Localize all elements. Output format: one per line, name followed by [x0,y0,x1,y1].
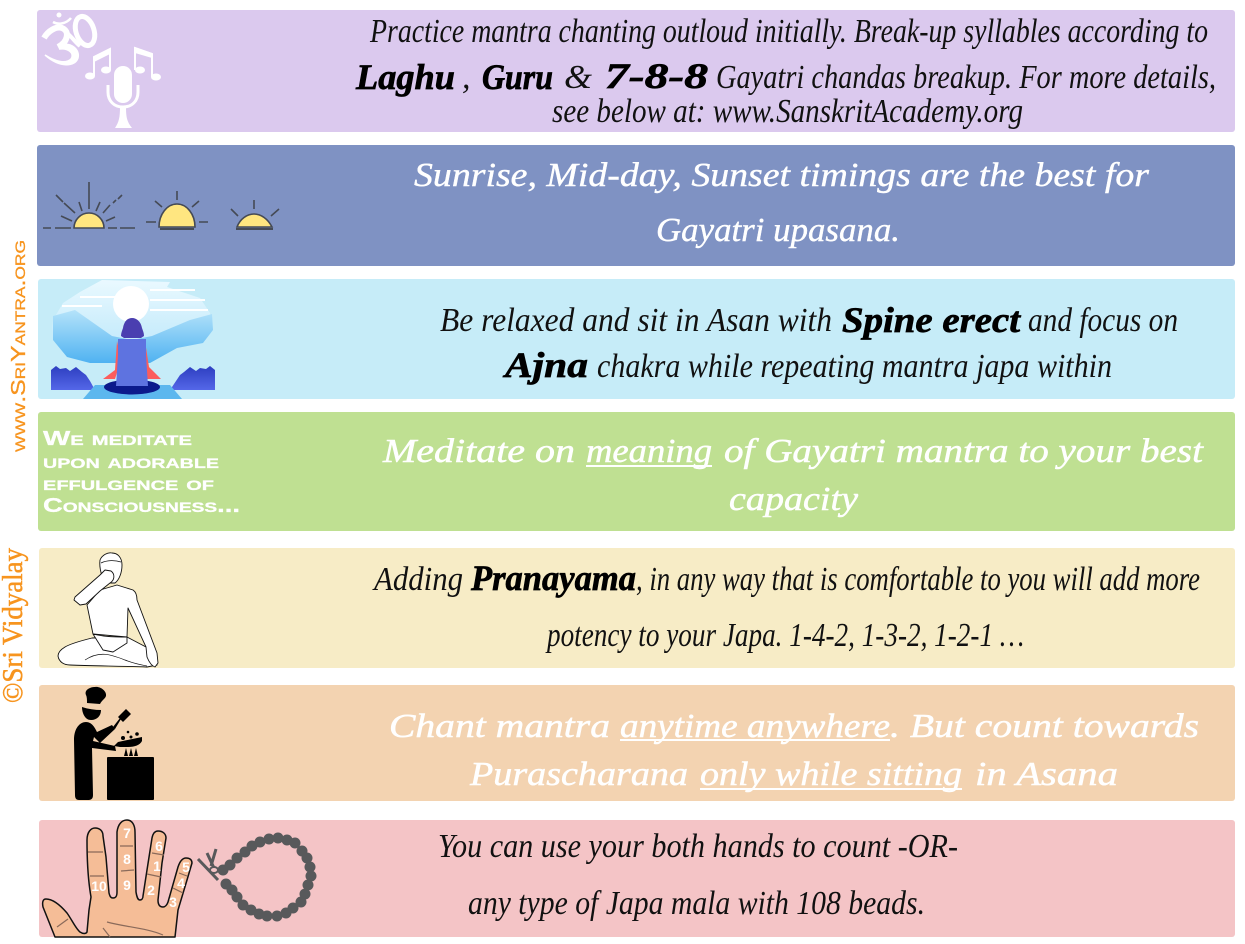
panel: posture [38,279,1235,399]
chanting text [355,13,1216,130]
meaning text [382,433,1205,518]
icon: three suns [43,182,279,229]
posture text: chakra while repeating mantra japa within [597,348,1112,385]
chanting text: & [564,59,593,96]
counting text: You can use your both hands to count -OR- [438,828,958,865]
icon: hand with counting numbers [43,820,192,937]
timings text [414,157,1150,249]
icon: hand with counting numbers: 4 [177,875,185,891]
icon: om with microphone and music notes [44,12,161,128]
chanting text: 7-8-8 [605,56,708,96]
chanting text: Laghu [355,57,455,97]
timings text: Sunrise, Mid-day, Sunset timings are the best for [414,157,1150,194]
timings text: Gayatri upasana. [656,212,900,249]
panel: timings [37,145,1235,266]
chant anywhere text: Chant mantra [389,708,610,745]
panel: meaning [38,412,1235,531]
meaning text: meaning [586,433,712,470]
mantra translation text: upon adorable [43,451,219,473]
icon: chef cooking [74,687,154,800]
icon: hand with counting numbers: 2 [147,882,155,898]
chant anywhere text: Purascharana [469,756,688,793]
counting text [438,828,958,922]
panel: chanting [37,10,1235,132]
icon: japa mala beads [198,832,316,922]
pranayama text [372,558,1200,654]
chant anywhere text: only while sitting [700,756,962,793]
posture text [440,300,1178,385]
counting text: any type of Japa mala with 108 beads. [468,885,925,922]
icon: hand with counting numbers: 10 [91,878,107,894]
chanting text: see below at: www.SanskritAcademy.org [552,93,1023,130]
icon: meditating woman [51,280,215,399]
panel: counting [39,820,1235,937]
meaning text: of Gayatri mantra to your best [724,433,1205,470]
icon: hand with counting numbers: 5 [182,859,190,875]
mantra translation text [43,428,240,517]
panel: pranayama [39,548,1235,668]
chant anywhere text: in Asana [975,756,1118,793]
icon: hand with counting numbers: 7 [123,825,131,841]
pranayama text: Pranayama [470,558,636,598]
icon: man doing pranayama [58,553,158,667]
chanting text: Guru [482,57,553,97]
chant anywhere text [389,708,1199,793]
meaning text: Meditate on [382,433,575,470]
icon: hand with counting numbers: 9 [123,877,131,893]
icon: hand with counting numbers: 6 [155,838,163,854]
pranayama text: Adding [372,561,463,598]
mantra translation text: We meditate [43,428,192,450]
icon: hand with counting numbers: 1 [153,858,161,874]
posture text: Ajna [503,345,588,385]
posture text: Be relaxed and sit in Asan with [440,302,832,339]
meaning text: capacity [729,481,859,518]
mantra translation text: Consciousness... [43,495,240,517]
chant anywhere text: . But count towards [890,708,1199,745]
sidebar credit: website: www.SriYantra.org [8,240,30,452]
chanting text: , [462,59,470,96]
pranayama text: potency to your Japa. 1-4-2, 1-3-2, 1-2-1 … [545,617,1024,654]
icon: hand with counting numbers: 3 [169,894,177,910]
panel: chant anywhere [39,685,1235,801]
posture text: Spine erect [842,300,1021,340]
icon: hand with counting numbers: 8 [123,851,131,867]
chant anywhere text: anytime anywhere [620,708,890,745]
mantra translation text: effulgence of [43,473,215,495]
posture text: and focus on [1028,302,1178,339]
